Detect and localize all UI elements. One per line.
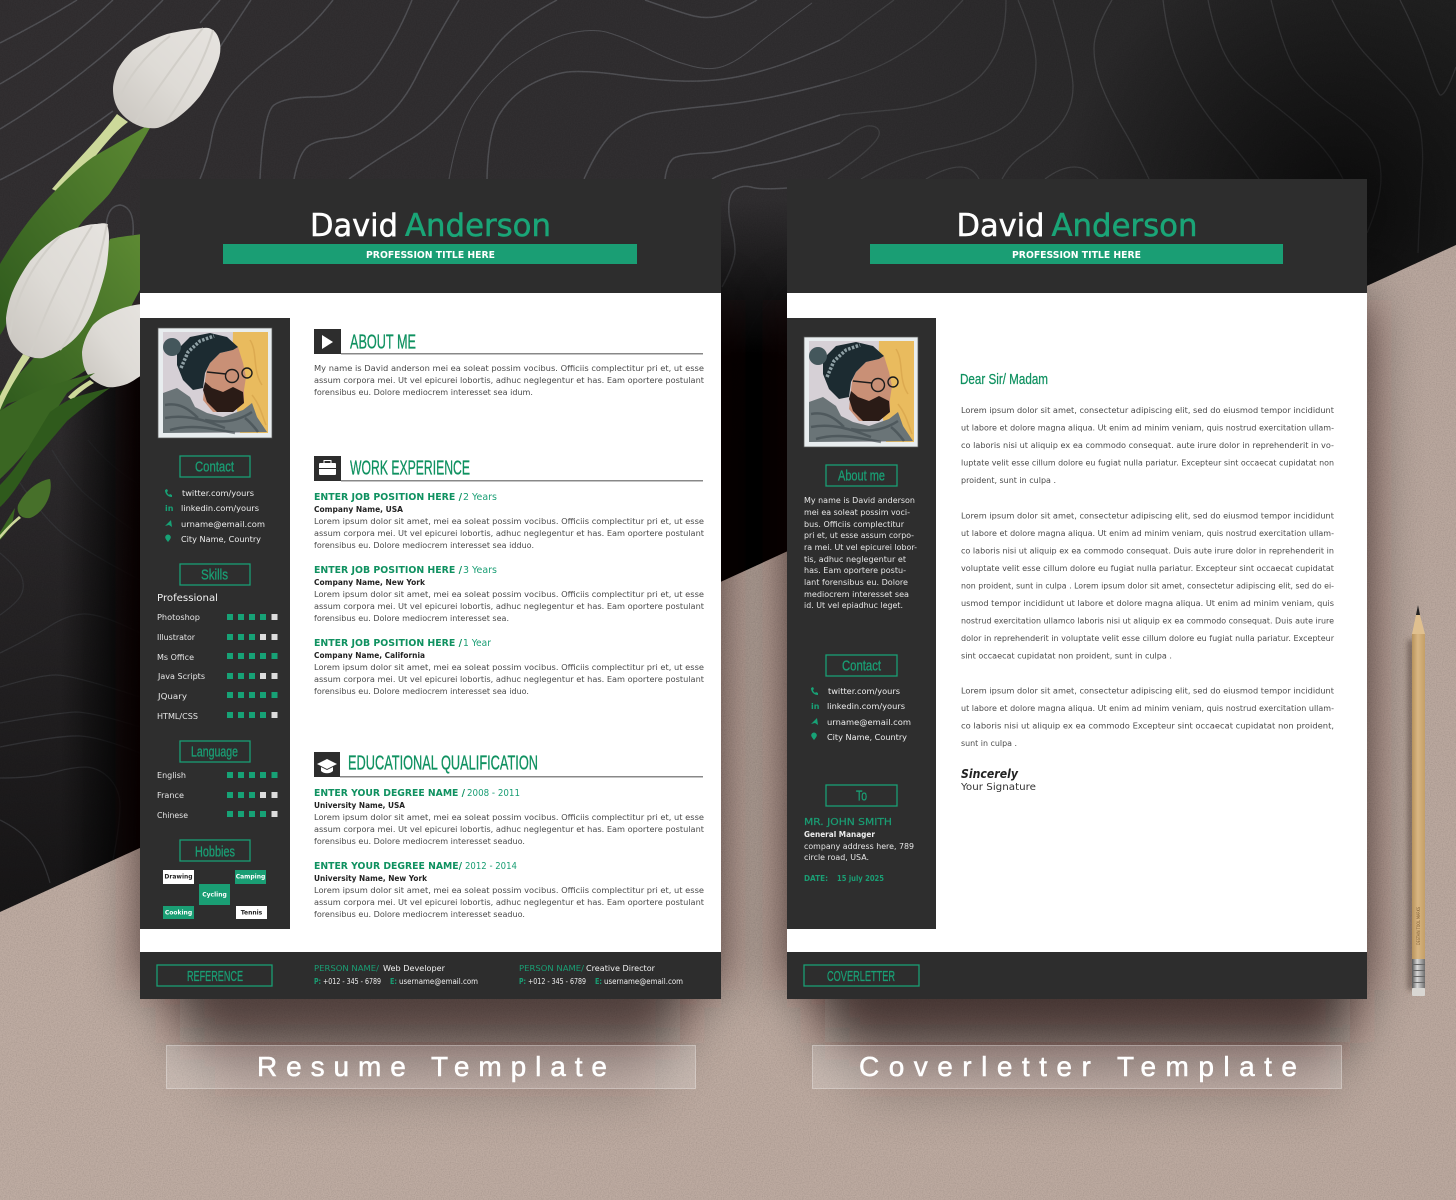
letter paragraph 1: ut labore et dolore magna aliqua. Ut enim ad minim veniam, quis nostrud exercitation ullam-: [961, 424, 1334, 432]
lower stem: [0, 354, 30, 410]
hobbies label: Hobbies: [195, 844, 235, 860]
letter paragraph 1: Lorem ipsum dolor sit amet, consectetur adipiscing elit, sed do eiusmod tempor incididunt: [961, 406, 1334, 415]
reference person 2: P:: [519, 977, 526, 986]
hobbies box: [180, 840, 250, 861]
coverletter page: [787, 179, 1367, 999]
to label: To: [856, 788, 867, 804]
hat pattern: [181, 336, 214, 368]
degree 2: ENTER YOUR DEGREE NAME/: [314, 861, 462, 872]
front leaf: [0, 373, 95, 479]
degree 1: assum corpora mei. Ut vel epicurei lobortis, adhuc neglegentur et has. Eam oportere postulant: [314, 825, 704, 834]
job 3: 1 Year: [463, 638, 492, 649]
profession title: PROFESSION TITLE HERE: [366, 250, 495, 261]
reference person 2: Creative Director: [586, 964, 656, 973]
reference person 1: +012 - 345 - 6789: [323, 977, 381, 986]
job 2: 3 Years: [463, 565, 497, 576]
letter paragraph 2: co laboris nisi ut aliquip ex ea commodo consequat. Duis aute irure dolor in reprehenderit in: [961, 546, 1334, 556]
beard: [203, 382, 244, 412]
letter paragraph 1: luptate velit esse cillum dolore eu fugiat nulla pariatur. Excepteur sint occaecat cupidatat non: [961, 458, 1334, 468]
job 3: ENTER JOB POSITION HERE /: [314, 638, 462, 649]
tulips: [0, 28, 220, 540]
letter paragraph 3: Lorem ipsum dolor sit amet, consectetur adipiscing elit, sed do eiusmod tempor incididunt: [961, 686, 1334, 696]
letter paragraph 2: non proident, sunt in culpa . Lorem ipsum dolor sit amet, consectetur adipiscing elit, sed do ei-: [961, 582, 1334, 590]
about me bio: pri et, ut esse assum corpo-: [804, 531, 914, 540]
caption: coverletter template: [812, 1046, 1342, 1088]
pencil shadow: [1408, 640, 1414, 990]
icon: graduation cap: [314, 752, 340, 777]
reference box: [157, 965, 272, 986]
letter paragraph 3: co laboris nisi ut aliquip ex ea commodo Excepteur sint occaecat cupidatat non proident,: [961, 722, 1334, 730]
about me box: [826, 465, 897, 486]
reference person 1: PERSON NAME/: [314, 964, 379, 973]
about me bio: My name is David anderson: [804, 496, 915, 505]
reference label: REFERENCE: [187, 968, 243, 985]
language heading: [180, 741, 250, 762]
reference person 2: [519, 964, 683, 986]
coverletter footer: [787, 952, 1367, 999]
job 1: assum corpora mei. Ut vel epicurei lobortis, adhuc neglegentur et has. Eam oportere postulant: [314, 529, 704, 538]
icon: phone: [811, 687, 818, 695]
job 1: [314, 492, 704, 550]
degree 1: University Name, USA: [314, 801, 405, 810]
twitter text: twitter.com/yours: [828, 687, 900, 696]
icon: send: [811, 718, 818, 725]
letter paragraph 2: usmod tempor incididunt ut labore et dolore magna aliqua. Ut enim ad minim veniam, quis: [961, 599, 1334, 608]
skills label: Skills: [201, 566, 228, 584]
page sheet: [787, 179, 1367, 999]
contact label: Contact: [842, 658, 882, 674]
email text: urname@email.com: [827, 718, 911, 727]
page sheet: [140, 179, 721, 999]
scarf: [163, 388, 267, 433]
education title: EDUCATIONAL QUALIFICATION: [348, 752, 538, 774]
photo frame: [158, 328, 272, 438]
icon: location pin: [165, 534, 171, 542]
java scripts: Java Scripts: [157, 672, 205, 681]
job 3: forensibus eu. Dolore mediocrem interesset sea iduo.: [314, 687, 529, 696]
job 2: forensibus eu. Dolore mediocrem interesset sea.: [314, 614, 509, 623]
france: France: [157, 791, 184, 800]
location text: City Name, Country: [827, 733, 907, 742]
about me heading: [826, 465, 897, 486]
section: work experience: [314, 456, 704, 696]
recipient block: circle road, USA.: [804, 853, 869, 862]
degree 1: [314, 788, 704, 846]
about me bio: ra mei. Ut vel epicurei lobor-: [804, 543, 917, 552]
reference person 1: E:: [390, 977, 397, 986]
job 1: Lorem ipsum dolor sit amet, mei ea soleat possim vocibus. Officiis complectitur pri et, ut esse: [314, 517, 704, 526]
job 1: 2 Years: [463, 492, 497, 503]
about me rule: [341, 353, 703, 354]
icon: briefcase: [314, 456, 341, 481]
icon: linkedin: in: [811, 702, 820, 711]
letter paragraph 2: nostrud exercitation ullamco laboris nisi ut aliquip ex ea commodo consequat. Duis aute irure: [961, 616, 1334, 626]
degree 2: Lorem ipsum dolor sit amet, mei ea soleat possim vocibus. Officiis complectitur pri et, ut esse: [314, 886, 704, 895]
letter paragraph 1: proident, sunt in culpa .: [961, 476, 1056, 485]
footer band: [787, 952, 1367, 999]
back leaf: [0, 234, 142, 412]
job 3: assum corpora mei. Ut vel epicurei lobortis, adhuc neglegentur et has. Eam oportere postulant: [314, 675, 704, 684]
hobby tags: [163, 870, 267, 919]
header band: [787, 179, 1367, 293]
icon: location pin: [811, 732, 817, 740]
gap shadow between pages: [721, 200, 787, 590]
reference person 2: username@email.com: [604, 977, 683, 986]
degree 1: forensibus eu. Dolore mediocrem interesset seaduo.: [314, 837, 525, 846]
letter paragraph 3: [961, 686, 1334, 748]
profession title: PROFESSION TITLE HERE: [1012, 250, 1141, 261]
work experience rule: [341, 480, 703, 482]
about me text: My name is David anderson mei ea soleat possim vocibus. Officiis complectitur pri et, ut esse: [314, 364, 704, 373]
bud 1 petal shading: [117, 28, 213, 124]
about me bio: mei ea soleat possim voci-: [804, 508, 910, 517]
letter paragraph 2: dolor in reprehenderit in voluptate velit esse cillum dolore eu fugiat nulla pariatur. Excepteur: [961, 634, 1335, 643]
recipient block: MR. JOHN SMITH: [804, 817, 892, 828]
tag: cycling: Cycling: [202, 892, 227, 898]
caption text: Coverletter Template: [859, 1051, 1297, 1082]
left page-side shadow on dark surface: [60, 340, 140, 900]
footer band: [140, 952, 721, 999]
location text: City Name, Country: [181, 535, 261, 544]
job 3: Lorem ipsum dolor sit amet, mei ea soleat possim vocibus. Officiis complectitur pri et, ut esse: [314, 663, 704, 672]
about me text: forensibus eu. Dolore mediocrem interesset sea idum.: [314, 388, 533, 397]
to box: [826, 785, 897, 806]
profession bar: [870, 244, 1283, 264]
about me bio: id. Ut vel epiadhuc leget.: [804, 601, 903, 610]
contact list: [165, 489, 265, 544]
scarf knit folds: [165, 404, 258, 433]
pencil ferrule: [1412, 959, 1425, 988]
contact box: [180, 456, 250, 477]
language ratings: [157, 771, 278, 820]
tag: cooking: Cooking: [165, 910, 192, 916]
first name: David: [956, 208, 1044, 244]
about me title: ABOUT ME: [350, 332, 416, 354]
reference person 2: PERSON NAME/: [519, 964, 584, 973]
degree 2: forensibus eu. Dolore mediocrem interesset seaduo.: [314, 910, 525, 919]
letter paragraph 2: ut labore et dolore magna aliqua. Ut enim ad minim veniam, quis nostrud exercitation ullam-: [961, 529, 1334, 538]
letter paragraph 2: voluptate velit esse cillum dolore eu fugiat nulla pariatur. Excepteur sint occaecat cupidatat: [961, 564, 1334, 573]
profile photo: [158, 328, 272, 438]
background darkening: [0, 340, 800, 920]
face: [203, 347, 246, 412]
section: about me: [314, 329, 704, 397]
job 2: Lorem ipsum dolor sit amet, mei ea soleat possim vocibus. Officiis complectitur pri et, ut esse: [314, 590, 704, 599]
resume page: [140, 179, 721, 999]
caption panel: [166, 1046, 696, 1088]
degree 2: 2012 - 2014: [465, 861, 517, 872]
glasses: [207, 368, 252, 382]
contact heading: [826, 655, 897, 676]
about me bio: lant forensibus eu. Dolore: [804, 578, 908, 587]
pom-pom: [163, 338, 181, 356]
contact heading: [180, 456, 250, 477]
left sidebar: [140, 318, 290, 929]
professional subheading: Professional: [157, 593, 218, 604]
reference person 2: +012 - 345 - 6789: [528, 977, 586, 986]
email text: urname@email.com: [181, 520, 265, 529]
signature: Your Signature: [960, 782, 1036, 793]
reference person 1: username@email.com: [399, 977, 478, 986]
about me bio: tis, adhuc neglegentur et: [804, 555, 906, 564]
tulip bud 1: [113, 28, 220, 128]
contact label: Contact: [195, 458, 235, 476]
about me text: [314, 364, 704, 397]
tag: drawing: Drawing: [164, 874, 193, 880]
skills heading: [180, 564, 250, 585]
pencil eraser: [1412, 988, 1425, 996]
about me text: assum corpora mei. Ut vel epicurei lobortis, adhuc neglegentur et has. Eam oportere postulant: [314, 376, 704, 385]
icon: phone: [165, 489, 172, 497]
tag: camping: Camping: [236, 874, 265, 880]
section: education: [314, 752, 704, 919]
degree 2: University Name, New York: [314, 874, 428, 883]
degree 2: [314, 861, 704, 919]
letter paragraph 2: Lorem ipsum dolor sit amet, consectetur adipiscing elit, sed do eiusmod tempor incididunt: [961, 512, 1334, 520]
about me bio: [804, 496, 917, 610]
jquery: JQuary: [157, 692, 188, 701]
reference person 2: E:: [595, 977, 602, 986]
coverletter box: [804, 965, 919, 986]
profile photo: [804, 337, 918, 447]
job 3: [314, 638, 704, 696]
about me bio: mediocrem interesset sea: [804, 590, 909, 599]
bud 2 petal shading: [10, 224, 107, 355]
job 3: Company Name, California: [314, 651, 425, 660]
right corner darkening: [1000, 0, 1456, 300]
lower faint contours: [0, 283, 787, 883]
twitter text: twitter.com/yours: [182, 489, 254, 498]
reference person 1: [314, 964, 478, 986]
ms office: Ms Office: [157, 653, 194, 662]
tag: tennis: Tennis: [241, 910, 263, 916]
contact box: [826, 655, 897, 676]
illustrator: Illustrator: [157, 633, 196, 642]
degree 1: Lorem ipsum dolor sit amet, mei ea soleat possim vocibus. Officiis complectitur pri et, ut esse: [314, 813, 704, 822]
letter paragraph 1: [961, 406, 1334, 485]
caption text: Resume Template: [257, 1051, 607, 1082]
job 2: ENTER JOB POSITION HERE /: [314, 565, 462, 576]
recipient block: company address here, 789: [804, 842, 914, 851]
english: English: [157, 771, 186, 780]
sincerely: Sincerely: [961, 767, 1019, 781]
icon: play: [314, 329, 341, 354]
page shadow: resume: [140, 300, 721, 1095]
job 1: Company Name, USA: [314, 505, 403, 514]
hobbies heading: [180, 840, 250, 861]
pencil point: [1416, 605, 1420, 615]
recipient block: General Manager: [804, 830, 875, 839]
right contour lines: [828, 0, 1456, 253]
pencil imprint: DESTAIN TOOL MARKS: [1416, 907, 1422, 945]
language label: Language: [191, 744, 238, 760]
photoshop: Photoshop: [157, 613, 200, 622]
name: [310, 208, 551, 244]
degree 2: assum corpora mei. Ut vel epicurei lobortis, adhuc neglegentur et has. Eam oportere postulant: [314, 898, 704, 907]
pencil: [1408, 605, 1425, 996]
pencil tip wood: [1412, 615, 1425, 634]
job 1: ENTER JOB POSITION HERE /: [314, 492, 462, 503]
letter paragraph 2: [961, 512, 1335, 660]
caption: resume template: [166, 1046, 696, 1088]
recipient block: 15 july 2025: [837, 874, 884, 883]
reference footer: [140, 952, 721, 999]
icon: linkedin: in: [165, 504, 174, 513]
chinese: Chinese: [157, 811, 188, 820]
beige paper surface: [0, 245, 1456, 1200]
degree 1: ENTER YOUR DEGREE NAME /: [314, 788, 465, 799]
tulip bud 2: [6, 223, 109, 358]
pencil body: [1412, 634, 1425, 959]
photo wall left: [163, 332, 268, 433]
far front leaf: [0, 388, 110, 507]
letter paragraph 1: co laboris nisi ut aliquip ex ea commodo consequat. aute irure dolor in reprehenderit in vo-: [961, 441, 1334, 450]
small bud leaf: [0, 508, 15, 540]
about me bio: has. Eam oportere postu-: [804, 566, 906, 575]
page shadow: coverletter: [787, 300, 1367, 1095]
job 2: Company Name, New York: [314, 578, 426, 587]
job 1: forensibus eu. Dolore mediocrem interesset sea idduo.: [314, 541, 534, 550]
recipient block: [804, 817, 914, 883]
header band: [140, 179, 721, 293]
profession bar: [223, 244, 637, 264]
letter paragraph 2: sint occaecat cupidatat non proident, sunt in culpa .: [961, 652, 1172, 660]
work experience title: WORK EXPERIENCE: [350, 458, 470, 480]
small bud stem: [0, 516, 21, 539]
hat: [177, 333, 238, 390]
job 2: assum corpora mei. Ut vel epicurei lobortis, adhuc neglegentur et has. Eam oportere postulant: [314, 602, 704, 611]
icon: send: [165, 520, 172, 527]
education rule: [340, 776, 703, 778]
last name: Anderson: [1052, 208, 1198, 244]
left sidebar: [787, 318, 936, 929]
letter paragraph 3: ut labore et dolore magna aliqua. Ut enim ad minim veniam, quis nostrud exercitation ullam-: [961, 704, 1334, 713]
language box: [180, 741, 250, 762]
linkedin text: linkedin.com/yours: [827, 702, 905, 711]
small bud: [18, 479, 51, 518]
first name: David: [310, 208, 398, 244]
upper leaf: [0, 122, 153, 335]
caption panel: [812, 1046, 1342, 1088]
to heading: [826, 785, 897, 806]
wall texture: [250, 340, 266, 425]
upper stem: [52, 114, 128, 192]
last name: Anderson: [405, 208, 551, 244]
letter salutation: Dear Sir/ Madam: [960, 371, 1048, 388]
degree 1: 2008 - 2011: [467, 788, 520, 799]
third stem: [68, 380, 94, 400]
tulip bud 3: [82, 304, 142, 387]
reference person 1: P:: [314, 977, 321, 986]
contour line pattern: [0, 0, 840, 287]
letter sign-off: [960, 767, 1036, 793]
job 2: [314, 565, 704, 623]
recipient block: DATE:: [804, 874, 828, 883]
html css: HTML/CSS: [157, 712, 198, 721]
about me label: About me: [838, 468, 885, 484]
photo wall yellow: [232, 332, 268, 433]
name: [956, 208, 1198, 244]
skills box: [180, 564, 250, 585]
contact list: [811, 687, 911, 742]
letter paragraph 3: sunt in culpa .: [961, 739, 1017, 748]
skill ratings: [157, 613, 278, 721]
reference person 1: Web Developer: [383, 964, 446, 973]
linkedin text: linkedin.com/yours: [181, 504, 259, 513]
coverletter label: COVERLETTER: [827, 968, 895, 985]
about me bio: bus. Officiis complectitur: [804, 520, 905, 529]
